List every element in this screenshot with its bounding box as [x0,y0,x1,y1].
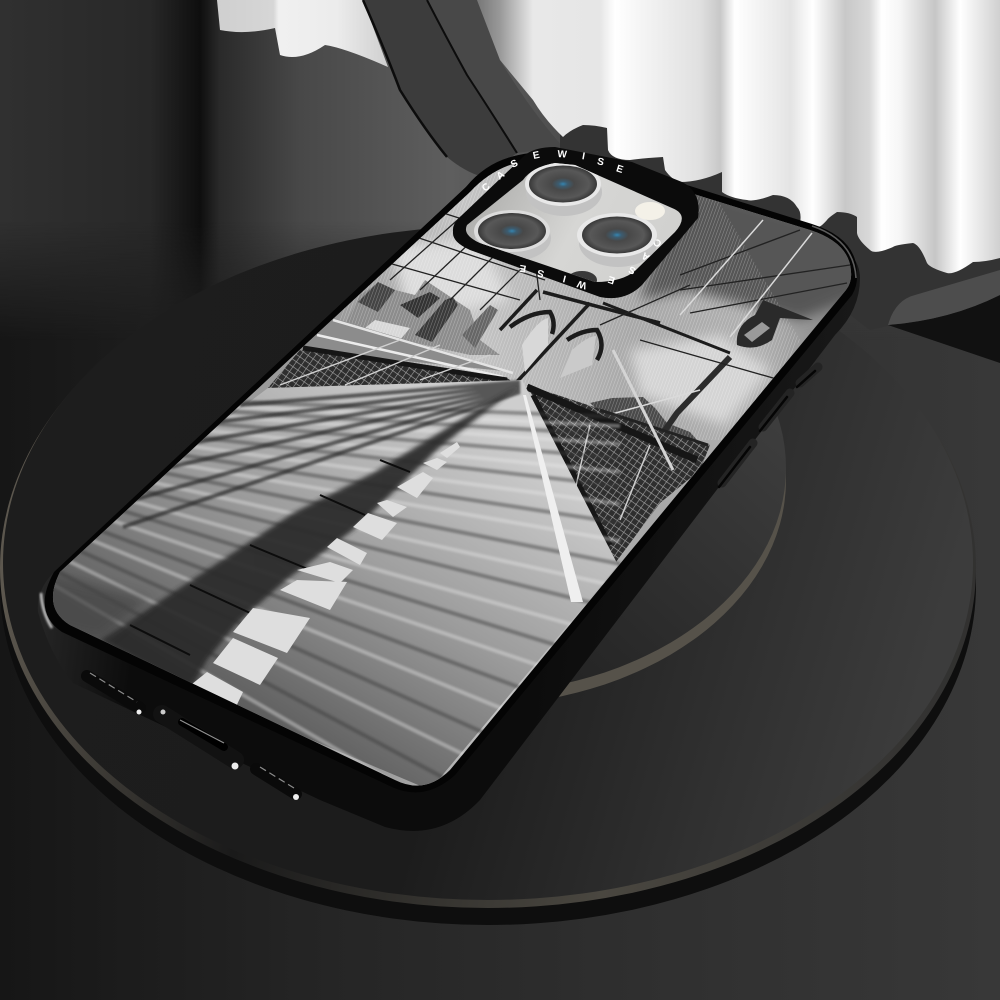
screen bezel [45,153,857,792]
lens: left [474,210,551,261]
lens: top [525,162,602,216]
right skyline [590,397,697,440]
right railing [527,350,710,562]
brand lettering: bottom: CASEWISE [518,236,664,291]
top right corner highlight [812,226,856,278]
white centre line [523,395,583,602]
lens: right [577,213,657,267]
bright sky left [390,240,510,320]
dark wedge object at right edge [888,270,1000,363]
printed photo: Brooklyn Bridge [52,162,852,786]
suspension cables [385,200,850,380]
plank lines: light [54,405,622,778]
fine cable texture [340,170,800,440]
left railing [268,318,513,388]
brand lettering: top: CASEWISE [480,149,625,194]
cable shadows converging on vanishing point [123,382,520,527]
camera glass [466,163,682,282]
sky [40,160,870,800]
phone case body [38,153,860,831]
bridge tower [498,288,730,380]
camera island [453,147,699,298]
pedestal: large disc [0,226,976,925]
lamp post [663,300,813,433]
shadow band [100,385,520,690]
pedestal: small disc [558,416,786,697]
bottom ports [87,673,299,800]
curtain: top right [477,0,1000,273]
plank lines: dark [60,399,621,778]
left skyline [345,280,500,355]
glossy corner highlight [41,593,52,628]
plank lines inside shadow [130,460,410,655]
bright cloud area [630,335,770,425]
lower left shade [53,575,150,638]
flash [635,202,665,220]
dark curved sculpture arcs [363,0,563,177]
dark upper right of sky [636,194,852,326]
curtain: top left [217,0,388,67]
right speaker [256,767,299,800]
white worn paint patches [187,442,460,713]
lidar sensor [571,271,597,282]
charging port [160,710,238,770]
shadowed floor behind phone [560,110,1000,330]
left speaker [87,673,142,714]
tower arch openings [522,318,596,378]
bridge deck [53,378,622,786]
side buttons [719,367,818,487]
